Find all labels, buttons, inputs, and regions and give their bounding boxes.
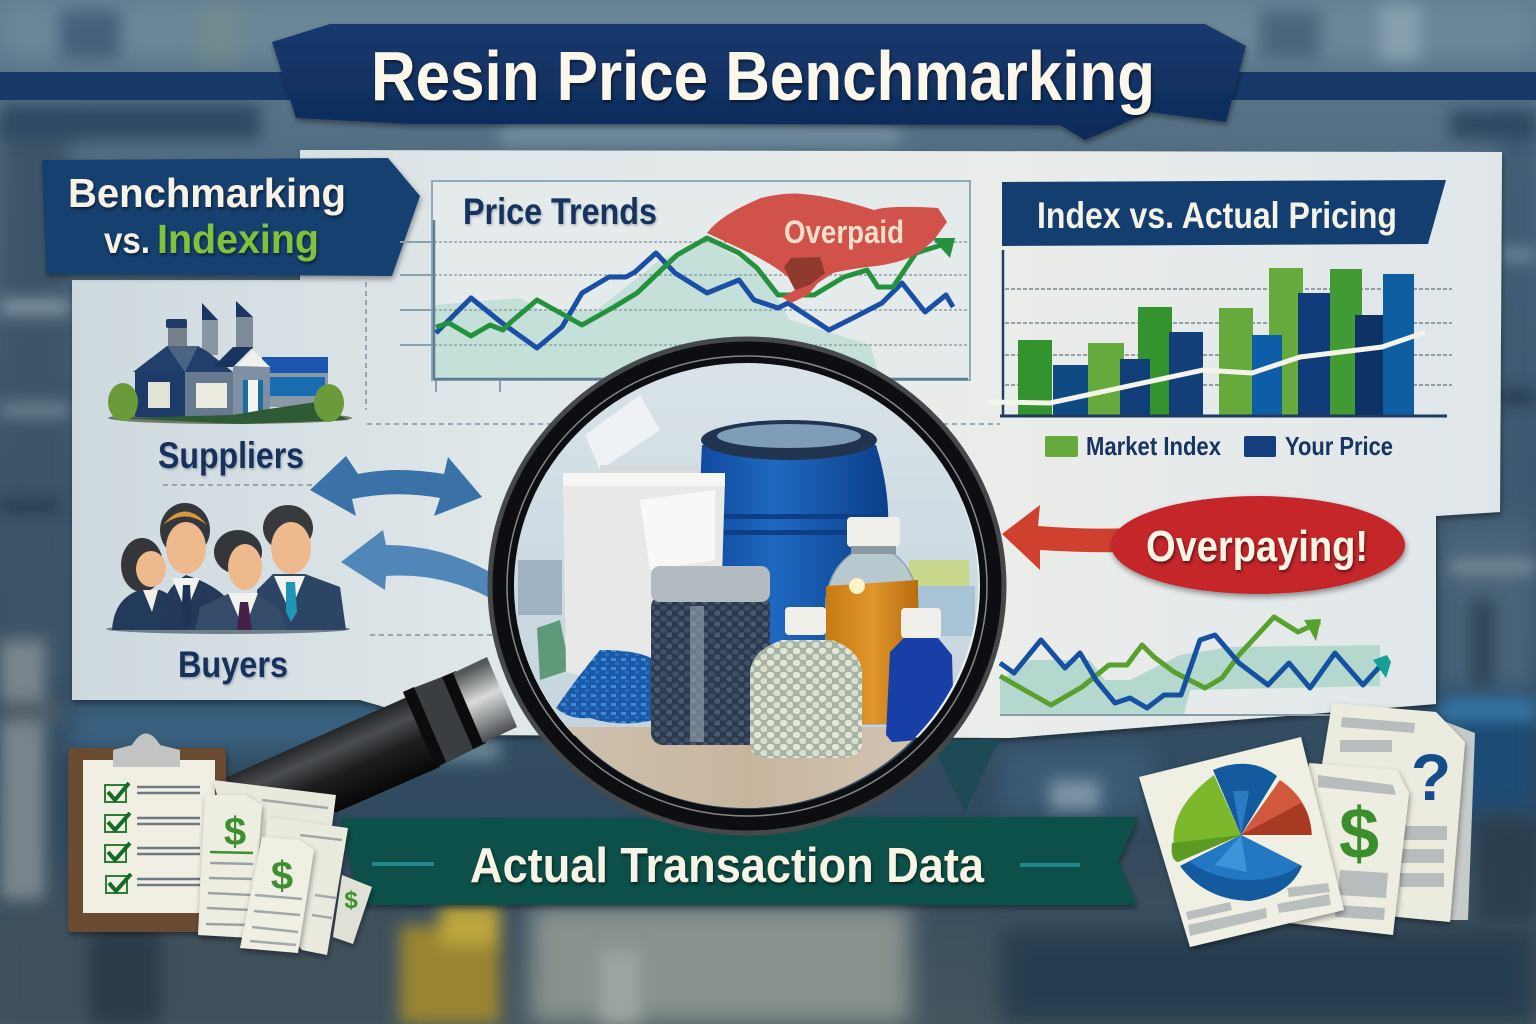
label: suppliers: Suppliers <box>158 435 304 476</box>
lens <box>514 363 978 808</box>
resin bag <box>563 465 725 690</box>
blue pellets <box>556 650 654 724</box>
pie chart document <box>1139 737 1344 947</box>
heading banner: Index vs. Actual Pricing <box>1037 195 1397 236</box>
heading text: Benchmarking <box>68 170 346 216</box>
icon: buyers group <box>106 503 350 634</box>
pie chart <box>1172 764 1312 901</box>
jar of dark pellets <box>651 566 770 745</box>
woman <box>112 538 185 630</box>
small receipt <box>333 875 372 944</box>
heading: price trends: Price Trends <box>463 191 657 232</box>
icon: report with pie chart <box>1139 703 1475 947</box>
heading text: Indexing <box>157 216 319 262</box>
white pellet bottle <box>750 607 862 758</box>
arrow: from buyers <box>341 530 490 598</box>
line: market index <box>1000 617 1320 705</box>
callout: overpaid splash: Overpaid <box>784 214 904 250</box>
checkbox rows <box>105 783 200 893</box>
heading text <box>68 170 346 262</box>
handle <box>225 657 517 812</box>
main paper panel <box>72 150 1502 738</box>
heading banner <box>1002 180 1446 246</box>
title text: Resin Price Benchmarking <box>371 37 1155 115</box>
icon: invoice documents <box>198 780 372 955</box>
icon: clipboard checklist <box>68 734 226 932</box>
legend: Your Price <box>1285 431 1393 461</box>
amber bottle <box>826 517 918 724</box>
dollar document <box>1289 763 1409 935</box>
chart: index vs actual pricing <box>990 180 1452 461</box>
small receipt: $ <box>344 887 358 914</box>
question document <box>1300 703 1465 922</box>
legend: Market Index <box>1086 431 1221 461</box>
line: market index <box>436 238 951 336</box>
panel: suppliers and buyers <box>106 301 352 685</box>
dollar document: $ <box>1339 794 1379 874</box>
man left <box>158 503 230 630</box>
banner: actual transaction data <box>340 817 1138 905</box>
lens rim <box>490 339 1004 833</box>
legend <box>1045 431 1393 461</box>
icon: magnifying glass <box>225 339 1004 833</box>
teal ribbon tip below lens <box>930 738 1000 812</box>
chart: bottom trend lines <box>1000 617 1391 715</box>
banner text: Actual Transaction Data <box>470 839 985 893</box>
callout: overpaying <box>1111 496 1405 594</box>
arrow: red pointing left <box>1002 505 1130 570</box>
callout: overpaid splash <box>707 194 947 303</box>
icon: factory supplier <box>108 301 352 424</box>
heading text: vs. <box>104 220 150 261</box>
banner: benchmarking vs indexing <box>42 158 420 276</box>
trend line <box>990 333 1423 403</box>
line: your price <box>1000 635 1383 708</box>
top stripe behind title <box>0 72 1536 100</box>
dollar document front: $ <box>271 854 293 898</box>
bars: market index <box>1018 268 1362 415</box>
question mark: ? <box>1411 740 1451 814</box>
dollar document front <box>240 837 314 953</box>
blue bottle <box>886 608 954 742</box>
drum <box>700 420 888 646</box>
man front <box>195 530 286 630</box>
chart: price trends <box>400 181 970 392</box>
bars: your price <box>1053 274 1414 415</box>
label: buyers: Buyers <box>178 644 288 685</box>
dollar document: $ <box>224 810 246 854</box>
line: your price <box>436 253 953 348</box>
callout: overpaying: Overpaying! <box>1146 522 1368 571</box>
man right <box>257 505 346 630</box>
dollar document <box>198 795 262 938</box>
arrow: two-way exchange <box>310 456 482 516</box>
title banner <box>272 24 1246 140</box>
